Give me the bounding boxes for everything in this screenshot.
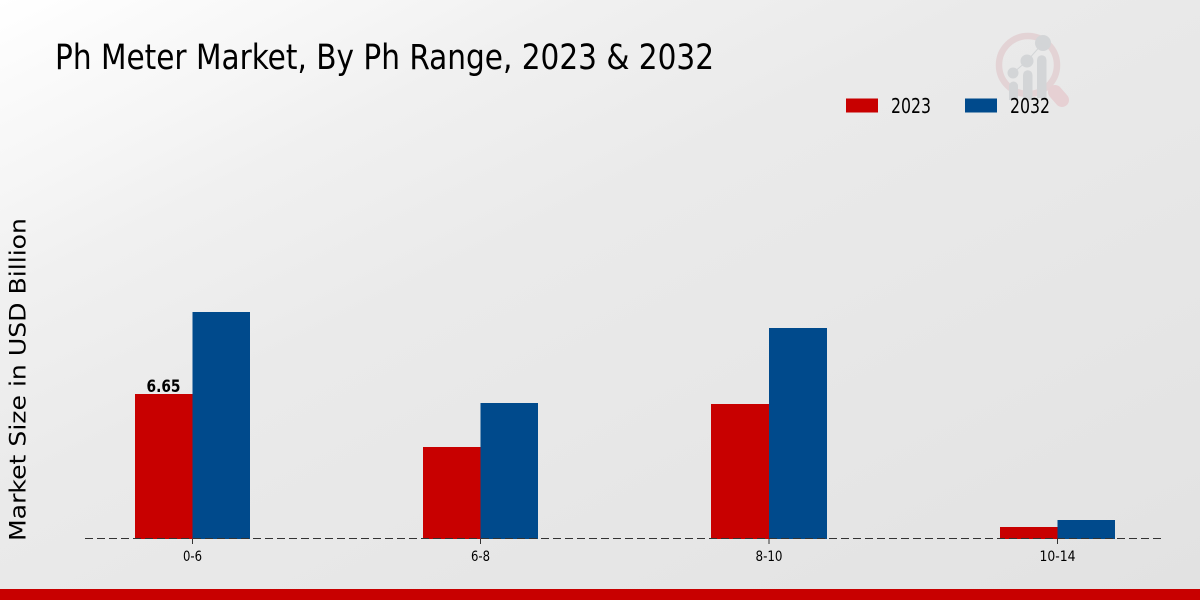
value label 6.65: 6.65	[146, 377, 180, 396]
bar chart	[85, 312, 1164, 565]
x axis labels: 8-10	[756, 549, 782, 565]
footer bar	[0, 589, 1200, 600]
x axis labels: 6-8	[471, 549, 490, 565]
logo watermark	[999, 35, 1062, 100]
x axis ticks	[192, 539, 1058, 544]
legend label 2032: 2032	[1010, 94, 1050, 118]
bars 10-14	[1000, 520, 1115, 539]
x axis baseline	[85, 538, 1164, 540]
y axis title: Market Size in USD Billion	[6, 218, 32, 541]
legend swatch 2023	[846, 98, 878, 112]
x axis labels: 0-6	[183, 549, 202, 565]
legend swatch 2032	[965, 98, 997, 112]
legend label 2023: 2023	[891, 94, 931, 118]
bars 8-10	[711, 328, 827, 539]
title: Ph Meter Market, By Ph Range, 2023 & 2032	[55, 38, 714, 78]
bars 0-6	[135, 312, 250, 539]
x axis labels: 10-14	[1040, 549, 1076, 565]
x axis labels	[183, 549, 1076, 565]
legend	[846, 94, 1050, 118]
bars 6-8	[423, 403, 538, 539]
